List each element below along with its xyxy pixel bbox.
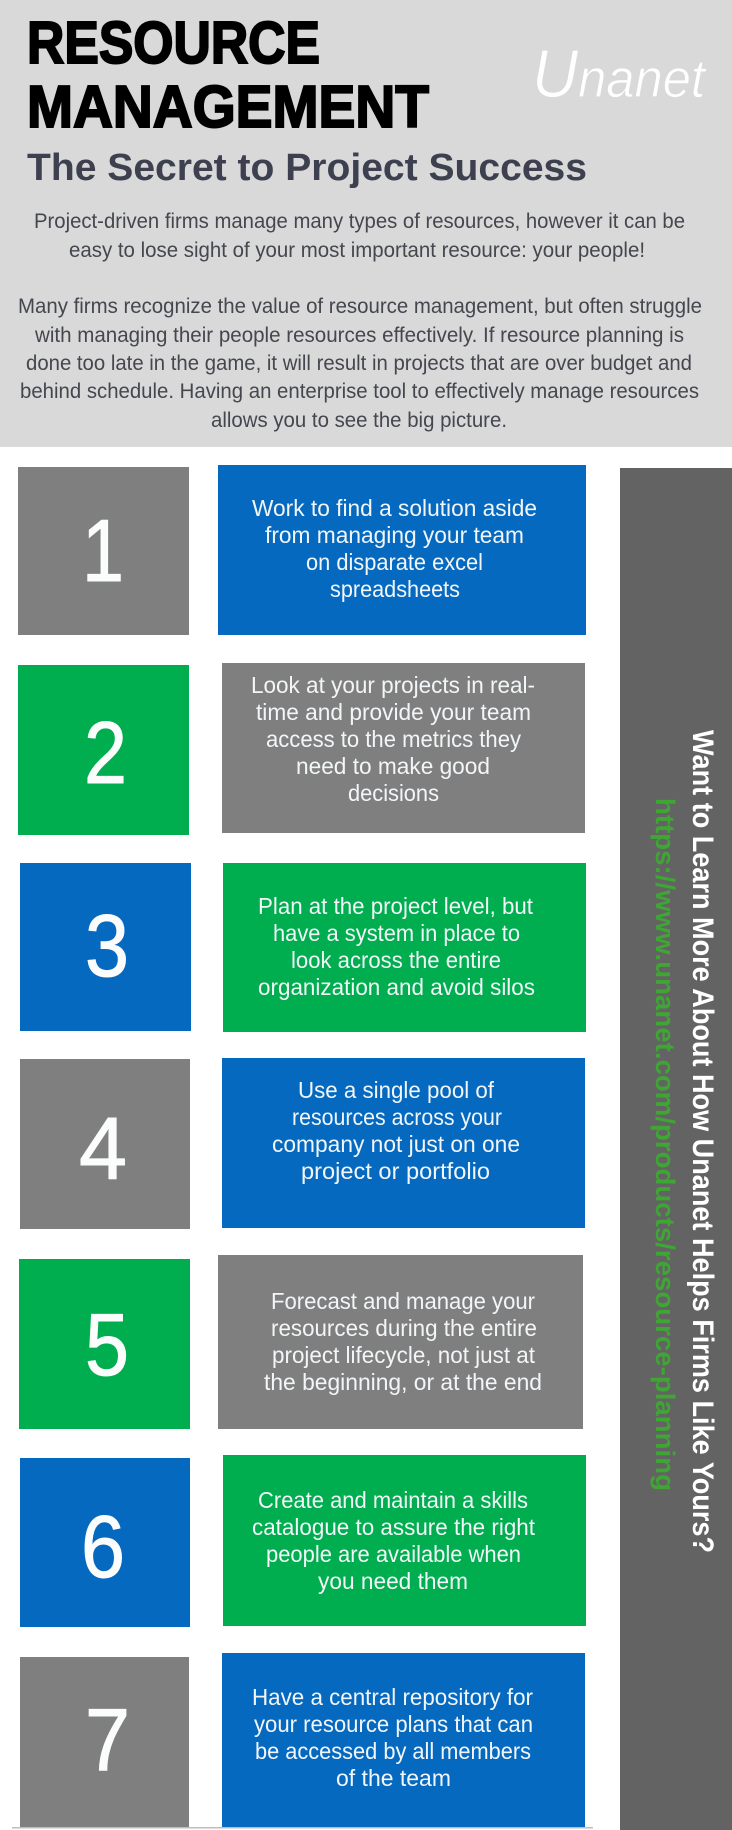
body paragraph: with managing their people resources effectively. If resource planning is — [34, 323, 684, 347]
text panel 1: spreadsheets — [330, 576, 460, 602]
intro paragraph: easy to lose sight of your most important resource: your people! — [69, 238, 645, 262]
step 1 — [18, 465, 586, 635]
text panel 5: the beginning, or at the end — [264, 1369, 542, 1395]
step 4 — [20, 1058, 585, 1229]
text panel 5: resources during the entire — [271, 1315, 537, 1341]
number tile 1 — [18, 467, 189, 635]
sidebar link: https://www.unanet.com/products/resource-planning — [650, 798, 680, 1491]
title — [27, 10, 429, 140]
body paragraph: allows you to see the big picture. — [211, 408, 507, 432]
text panel 7 — [222, 1653, 585, 1827]
step 6 — [20, 1455, 586, 1627]
step 2 — [18, 663, 585, 835]
body paragraph — [18, 294, 702, 432]
text panel 2: decisions — [348, 780, 439, 806]
subtitle: The Secret to Project Success — [27, 147, 587, 189]
number tile 4 — [20, 1059, 190, 1229]
text panel 4: resources across your — [292, 1104, 502, 1130]
number tile 2: 2 — [84, 703, 127, 802]
number tile 2 — [18, 665, 189, 835]
text panel 5: Forecast and manage your — [271, 1288, 535, 1314]
intro paragraph: Project-driven firms manage many types of resources, however it can be — [34, 209, 685, 233]
text panel 3: Plan at the project level, but — [258, 893, 533, 919]
title: MANAGEMENT — [27, 74, 429, 140]
body paragraph: Many firms recognize the value of resource management, but often struggle — [18, 294, 702, 318]
sidebar call to action: Want to Learn More About How Unanet Helps Firms Like Yours? — [686, 730, 719, 1553]
text panel 7: be accessed by all members — [255, 1738, 531, 1764]
text panel 4: project or portfolio — [301, 1158, 490, 1184]
number tile 3: 3 — [85, 896, 129, 995]
text panel 2 — [222, 663, 585, 833]
text panel 1: from managing your team — [265, 522, 524, 548]
number tile 4: 4 — [79, 1099, 127, 1198]
text panel 7: Have a central repository for — [252, 1684, 533, 1710]
text panel 3: organization and avoid silos — [258, 974, 535, 1000]
text panel 2: time and provide your team — [256, 699, 531, 725]
text panel 6 — [223, 1455, 586, 1626]
text panel 4: Use a single pool of — [298, 1077, 494, 1103]
number tile 5: 5 — [85, 1295, 129, 1394]
text panel 5: project lifecycle, not just at — [272, 1342, 535, 1368]
text panel 5 — [218, 1255, 583, 1429]
number tile 6: 6 — [81, 1497, 125, 1596]
text panel 1: Work to find a solution aside — [252, 495, 537, 521]
number tile 7: 7 — [85, 1690, 130, 1789]
number tile 3 — [20, 863, 191, 1031]
header panel — [0, 0, 732, 447]
number tile 1: 1 — [82, 501, 124, 600]
title: RESOURCE — [27, 10, 320, 76]
text panel 7: your resource plans that can — [254, 1711, 533, 1737]
text panel 2: Look at your projects in real- — [251, 672, 535, 698]
body paragraph: done too late in the game, it will result in projects that are over budget and — [26, 351, 692, 375]
step 7 — [20, 1653, 585, 1827]
text panel 6: catalogue to assure the right — [252, 1514, 535, 1540]
text panel 6: Create and maintain a skills — [258, 1487, 528, 1513]
text panel 1: on disparate excel — [306, 549, 483, 575]
text panel 7: of the team — [336, 1765, 451, 1791]
text panel 4 — [222, 1058, 585, 1228]
text panel 1 — [218, 465, 586, 635]
number tile 5 — [19, 1259, 190, 1429]
text panel 6: people are available when — [266, 1541, 521, 1567]
text panel 3 — [223, 863, 586, 1032]
logo: Unanet: Unanet — [532, 36, 707, 112]
text panel 2: need to make good — [296, 753, 490, 779]
step 3 — [20, 863, 586, 1032]
text panel 6: you need them — [318, 1568, 468, 1594]
number tile 6 — [20, 1458, 190, 1627]
text panel 4: company not just on one — [272, 1131, 520, 1157]
text panel 3: look across the entire — [291, 947, 501, 973]
number tile 7 — [20, 1657, 189, 1827]
intro paragraph — [34, 209, 685, 262]
text panel 3: have a system in place to — [273, 920, 520, 946]
text panel 2: access to the metrics they — [266, 726, 521, 752]
body paragraph: behind schedule. Having an enterprise tool to effectively manage resources — [20, 379, 699, 403]
sidebar panel — [620, 468, 732, 1830]
step 5 — [19, 1255, 583, 1429]
